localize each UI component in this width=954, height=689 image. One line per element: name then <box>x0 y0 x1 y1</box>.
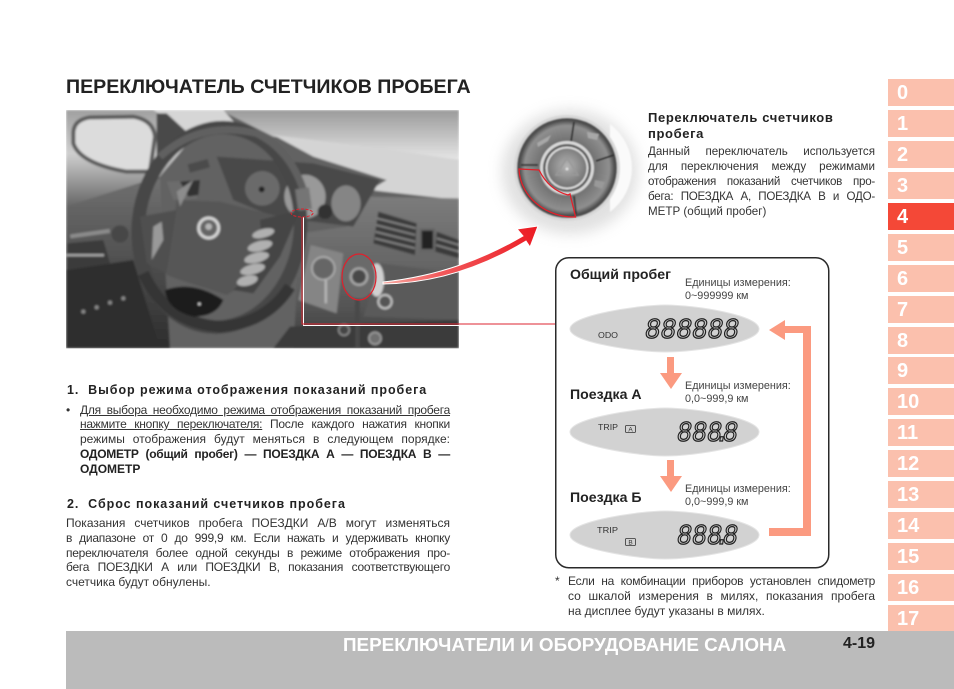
section 2: trip reset text: счетчика будут обнулены. <box>66 575 211 589</box>
display: trip B <box>570 511 759 559</box>
vents <box>373 212 417 255</box>
chapter tabs: 14 <box>897 515 919 537</box>
chapter tabs: 11 <box>897 422 918 444</box>
chapter tabs: 2 <box>897 144 908 166</box>
footnote: со шкалой измерения в милях, показания пробега <box>568 589 875 603</box>
footnote: * <box>555 574 560 588</box>
arrow: trip B back to odometer <box>769 320 811 536</box>
switch close-up <box>502 110 638 234</box>
section 2: trip reset text <box>66 497 450 589</box>
display: trip B: TRIP <box>597 526 618 535</box>
footer section title: ПЕРЕКЛЮЧАТЕЛИ И ОБОРУДОВАНИЕ САЛОНА <box>343 634 786 655</box>
chapter tabs: 15 <box>897 546 919 568</box>
dashed marker on instrument cluster <box>291 209 313 217</box>
section 1: mode selection text: Для выбора необходимо режима отображения показаний пробега <box>80 403 450 417</box>
display: odometer: 888888 <box>645 316 739 348</box>
panel: odometer and trip displays <box>555 257 830 568</box>
units: trip B: 0,0~999,9 км <box>685 496 748 508</box>
units: trip A: Единицы измерения: <box>685 380 791 392</box>
switch description: пробега <box>648 126 704 141</box>
display: trip A: 888.8 <box>677 419 738 451</box>
page number: 4-19 <box>843 635 875 652</box>
section 2: trip reset text: 2. Сброс показаний счетчиков пробега <box>67 497 346 511</box>
circle marker around switch in photo <box>342 254 376 300</box>
switch description: Переключатель счетчиков <box>648 110 833 125</box>
units: total mileage: 0~999999 км <box>685 290 748 302</box>
chapter tabs: 4 <box>897 206 908 228</box>
chapter tabs: 6 <box>897 268 908 290</box>
switch description: Данный переключатель используется <box>648 145 875 158</box>
section 1: mode selection text: нажмите кнопку переключателя: После каждого нажатия кнопки <box>80 417 450 431</box>
ignition and lower console <box>298 245 343 313</box>
section 1: mode selection text: 1. Выбор режима отображения показаний пробега <box>67 383 427 397</box>
chapter tabs: 17 <box>897 608 919 630</box>
section 1: mode selection text: режимы отображения будут меняться в следующем порядке: <box>80 432 450 446</box>
chapter tabs: 12 <box>897 453 919 475</box>
section 1: mode selection text <box>66 383 450 476</box>
footnote <box>555 574 876 618</box>
white halo of leader line <box>304 217 459 326</box>
section 2: trip reset text: Показания счетчиков пробега ПОЕЗДКИ А/В могут изменяться <box>66 516 450 530</box>
chapter tabs: 8 <box>897 330 908 352</box>
leader line to display panel <box>302 217 555 324</box>
chapter tabs: 13 <box>897 484 919 506</box>
chapter tabs: 1 <box>897 113 908 135</box>
units: total mileage <box>685 277 791 302</box>
footnote: Если на комбинации приборов установлен спидометр <box>568 574 875 588</box>
switch description: МЕТР (общий пробег) <box>648 205 766 218</box>
photo: steering wheel and dashboard <box>66 110 459 349</box>
section 2: trip reset text: в диапазоне от 0 до 999,9 км. Если нажать и удерживать кнопку <box>66 531 450 545</box>
units: trip A: 0,0~999,9 км <box>685 393 748 405</box>
chapter tabs: 0 <box>897 82 908 104</box>
footer bar <box>66 631 954 689</box>
chapter tabs: 3 <box>897 175 908 197</box>
chapter tabs: 5 <box>897 237 908 259</box>
section 1: mode selection text: ОДОМЕТР <box>80 462 140 476</box>
label: total mileage: Общий пробег <box>570 266 671 282</box>
label: trip B: Поездка Б <box>570 489 641 505</box>
switch description: бега: ПОЕЗДКА А, ПОЕЗДКА В и ОДО- <box>648 190 875 203</box>
units: trip B: Единицы измерения: <box>685 483 791 495</box>
section 2: trip reset text: переключателя более одной секунды в режиме отображения про- <box>66 546 450 560</box>
chapter tabs: 9 <box>897 360 908 382</box>
footnote: на дисплее будут указаны в милях. <box>568 604 765 618</box>
arrow: trip A to trip B <box>660 460 682 492</box>
steering wheel <box>127 118 311 339</box>
units: total mileage: Единицы измерения: <box>685 277 791 289</box>
curved red arrow <box>383 226 538 284</box>
units: trip B <box>685 483 791 508</box>
chapter tabs: 16 <box>897 577 919 599</box>
units: trip A <box>685 380 791 405</box>
display: odometer: ODO <box>598 331 618 340</box>
section 1: mode selection text: ОДОМЕТР (общий пробег) — ПОЕЗДКА А — ПОЕЗДКА В — <box>80 447 450 461</box>
arrow: odometer to trip A <box>660 357 682 389</box>
switch description: для переключения между режимами <box>648 160 875 173</box>
display: odometer <box>570 305 759 352</box>
display: trip A <box>570 408 759 456</box>
display: trip A: A <box>628 426 633 434</box>
chapter tabs: 7 <box>897 299 908 321</box>
display: trip A: TRIP <box>598 423 618 432</box>
title: ПЕРЕКЛЮЧАТЕЛЬ СЧЕТЧИКОВ ПРОБЕГА <box>66 76 471 98</box>
display: trip B: 888.8 <box>677 522 738 554</box>
switch description <box>648 110 875 218</box>
switch description: отображения показаний счетчиков про- <box>648 175 875 188</box>
illustration: photo, switch close-up and arrow <box>66 106 642 348</box>
chapter tabs <box>888 79 954 631</box>
display: trip B: B <box>628 540 633 546</box>
hazard switch in photo <box>369 263 384 297</box>
section 1: mode selection text: • <box>66 403 70 417</box>
chapter tabs: 10 <box>897 391 919 413</box>
section 2: trip reset text: бега ПОЕЗДКИ А или ПОЕЗДКИ В, показания соответствующего <box>66 560 450 574</box>
label: trip A: Поездка А <box>570 386 642 402</box>
